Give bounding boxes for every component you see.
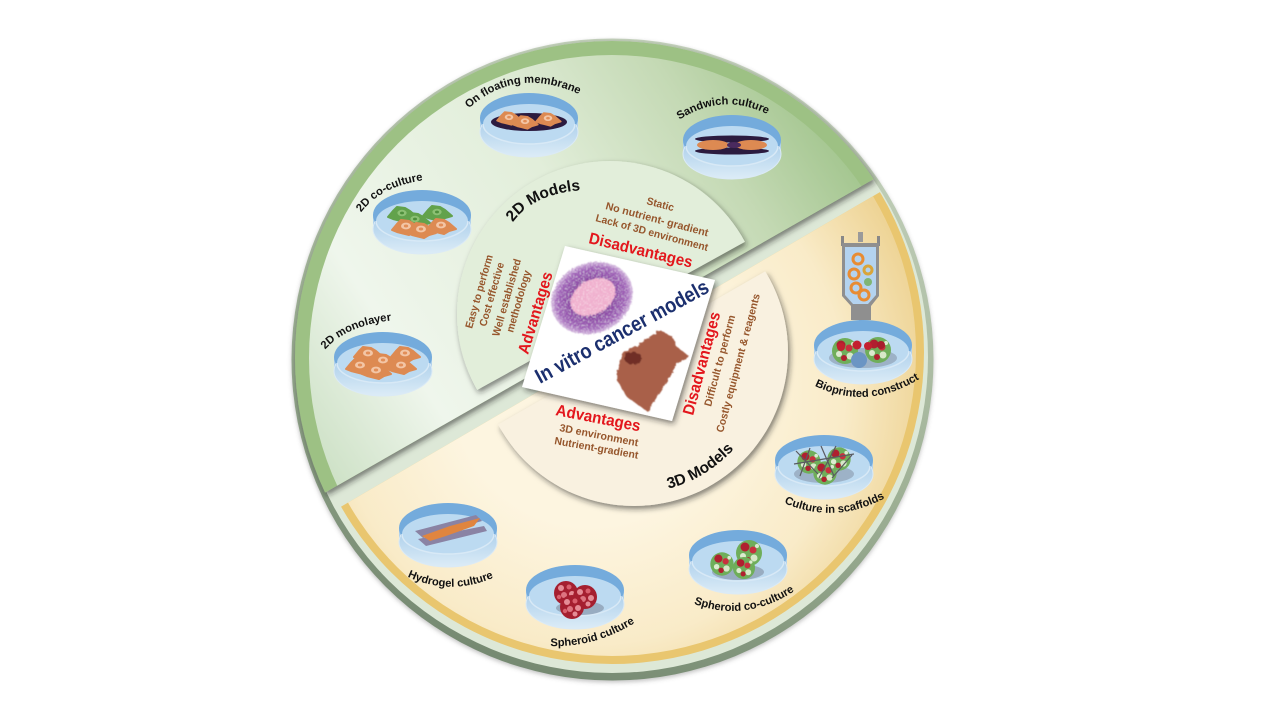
infographic: in vitro cancer models wheel <box>289 38 936 685</box>
panel: 3D models sector <box>341 192 924 664</box>
label: hydrogel culture: Hydrogel culture <box>408 570 492 589</box>
label: 2D monolayer: 2D monolayer <box>320 314 391 350</box>
label: 2D co-culture: 2D co-culture <box>356 174 422 212</box>
image: histology section <box>539 249 645 347</box>
heading: 3D disadvantages: Disadvantages <box>680 310 724 417</box>
text: 3D disadvantages list: Costly equipment & reagents <box>714 292 763 434</box>
dish: on floating membrane <box>480 93 578 157</box>
heading: 2D Models: 2D Models <box>506 180 580 222</box>
heading: 3D Models: 3D Models <box>666 445 732 488</box>
text: 2D advantages list <box>463 253 534 338</box>
heading: 2D advantages: Advantages <box>516 270 557 356</box>
text: 3D disadvantages list: Difficult to perform <box>702 314 738 408</box>
heading: 3D advantages: Advantages <box>554 402 642 435</box>
text: 2D disadvantages list: No nutrient- gradient <box>604 200 710 239</box>
text: 2D advantages list: Easy to perform <box>463 253 496 330</box>
dish: spheroid co-culture <box>689 530 787 594</box>
text: 2D disadvantages list <box>594 195 710 254</box>
dish: bioprinted construct <box>814 320 912 384</box>
text: 2D advantages list: methodology <box>504 269 534 334</box>
dish: 2D monolayer <box>334 332 432 396</box>
panel: 2D models sector <box>294 40 878 498</box>
panel: 3D models inner sector <box>498 272 794 514</box>
label: spheroid culture: Spheroid culture <box>550 618 634 648</box>
label: culture in scaffolds: Culture in scaffolds <box>786 494 884 513</box>
label: bioprinted construct: Bioprinted construct <box>815 373 920 397</box>
panel: central card <box>522 246 715 421</box>
dish: culture in scaffolds <box>775 435 873 499</box>
label: on floating membrane: On floating membrane <box>466 76 580 107</box>
dish: hydrogel culture <box>399 503 497 567</box>
icon: bioprinter syringe <box>841 232 880 338</box>
heading: 2D disadvantages: Disadvantages <box>587 230 694 272</box>
text: 2D advantages list: Well established <box>490 258 524 338</box>
outer disc rim <box>292 38 934 680</box>
panel: 2D models inner sector <box>454 160 750 396</box>
text: 2D advantages list: Cost effective <box>477 261 507 328</box>
text: 3D advantages list: 3D environment <box>558 422 640 449</box>
text: 2D disadvantages list: Lack of 3D environment <box>594 212 710 254</box>
dish: spheroid culture <box>526 565 624 629</box>
title: In vitro cancer models: In vitro cancer models <box>531 276 713 388</box>
text: 3D advantages list <box>553 422 640 462</box>
text: 3D advantages list: Nutrient-gradient <box>553 435 640 462</box>
label: sandwich culture: Sandwich culture <box>676 96 768 118</box>
dish: sandwich culture <box>683 115 781 179</box>
dish: 2D co-culture <box>373 190 471 254</box>
label: spheroid co-culture: Spheroid co-culture <box>694 587 794 611</box>
text: 2D disadvantages list: Static <box>645 195 675 214</box>
image: tumour tissue <box>617 330 690 412</box>
